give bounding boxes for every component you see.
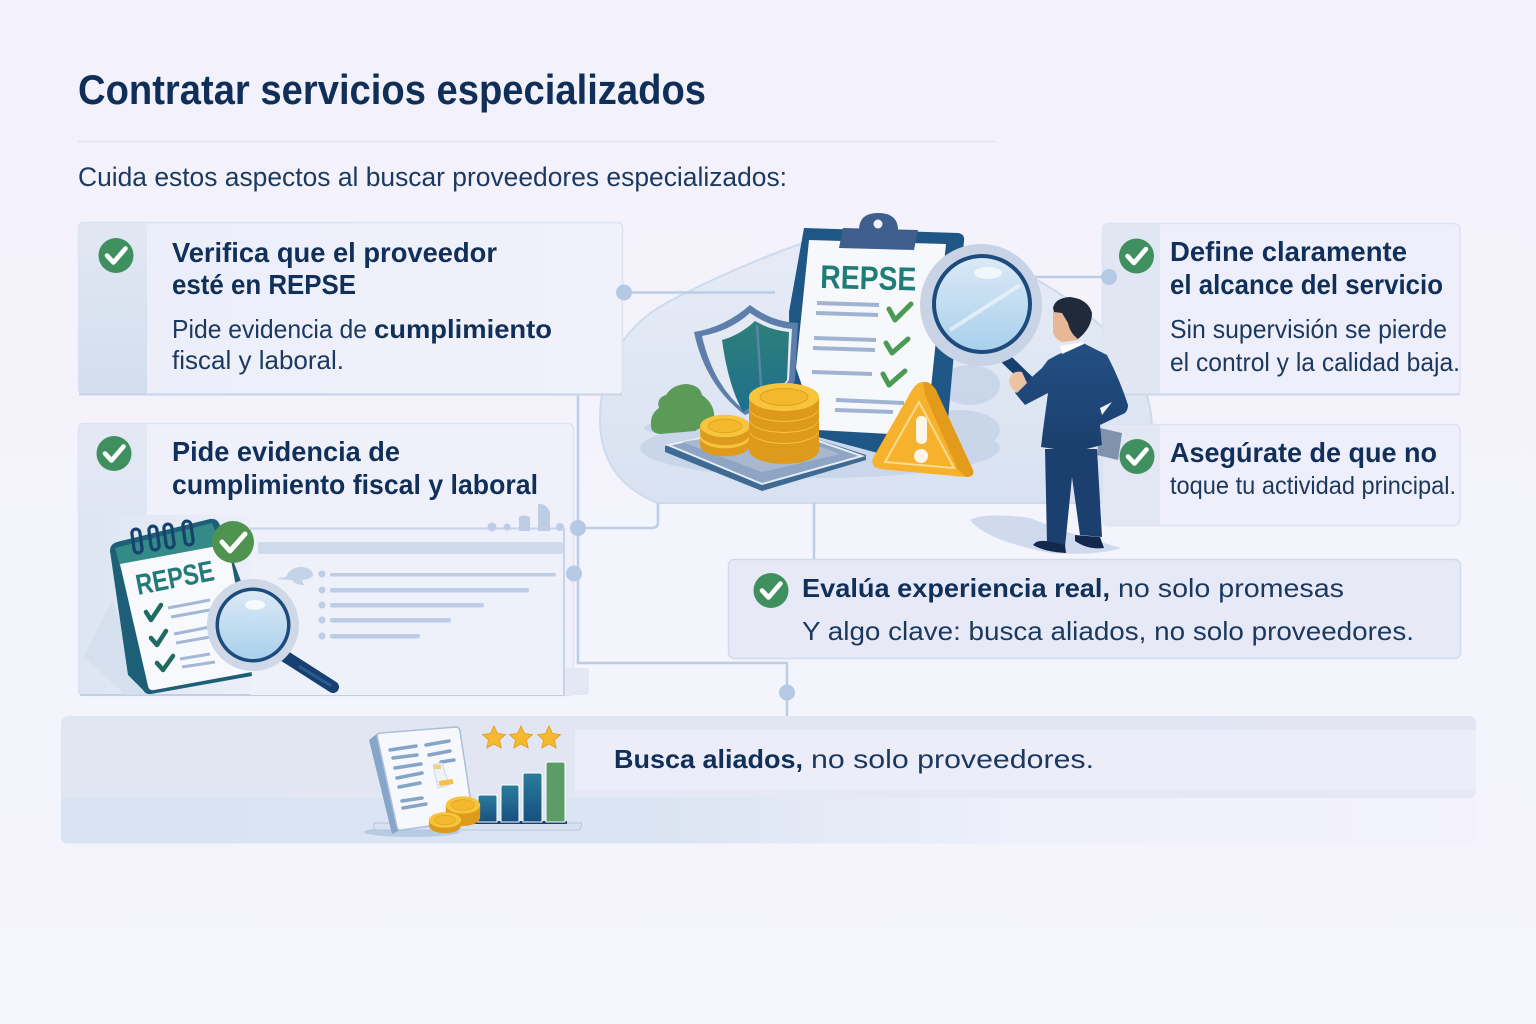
illustration: report, stars, bars and coins (364, 726, 582, 837)
figure: businessman (1009, 297, 1128, 553)
heading: Define claramente (1170, 236, 1407, 267)
heading (1170, 236, 1443, 300)
heading: Pide evidencia de (172, 436, 400, 467)
panel: verifica REPSE (78, 222, 622, 394)
body text (1170, 314, 1460, 377)
panel: pide evidencia (78, 424, 589, 696)
illustration: REPSE calendar and magnifier: REPSE (133, 555, 217, 602)
icon: bush (651, 384, 714, 434)
body text: Pide evidencia de (172, 314, 367, 344)
heading: Verifica que el proveedor (172, 237, 497, 268)
body text: Y algo clave: busca aliados, no solo proveedores. (802, 616, 1414, 646)
panel: define alcance (1102, 224, 1460, 394)
body text (172, 314, 552, 375)
icon: check (1119, 238, 1154, 274)
icon: check (96, 436, 132, 471)
ground shadows (640, 365, 1121, 554)
icon: clipboard (789, 213, 964, 453)
heading: cumplimiento fiscal y laboral (172, 469, 538, 500)
body text: cumplimiento (374, 314, 552, 344)
connector lines (578, 277, 1105, 716)
heading (802, 573, 1344, 603)
heading (614, 744, 1094, 774)
body text: Sin supervisión se pierde (1170, 314, 1447, 344)
heading: no solo promesas (1118, 573, 1344, 603)
heading: Asegúrate de que no (1170, 437, 1437, 468)
heading: no solo proveedores. (811, 744, 1094, 774)
heading: esté en REPSE (172, 269, 356, 300)
panel: asegúrate (1102, 424, 1460, 526)
icon: warning triangle (872, 382, 973, 477)
icon: check (98, 238, 134, 273)
body text: toque tu actividad principal. (1170, 472, 1456, 500)
subtitle: Cuida estos aspectos al buscar proveedores especializados: (78, 162, 787, 192)
icon: shield (694, 305, 798, 415)
hero illustration (640, 213, 1128, 554)
body text: fiscal y laboral. (172, 345, 344, 375)
heading: el alcance del servicio (1170, 269, 1443, 300)
icon: tablet base (665, 424, 866, 491)
heading: Evalúa experiencia real, (802, 573, 1110, 603)
icon: check asegúrate (1120, 439, 1154, 474)
heading (172, 436, 538, 500)
mini report list (250, 504, 564, 695)
connector nodes (566, 269, 1117, 700)
hero backdrop blob (600, 244, 1152, 503)
panel: evalúa experiencia (728, 560, 1460, 658)
heading (172, 237, 497, 300)
icon: large coin stack (749, 383, 819, 464)
icon: clipboard: REPSE (820, 258, 917, 298)
panel: busca aliados (61, 716, 1476, 844)
icon: small coin stack (700, 415, 750, 456)
icon: magnifier (920, 244, 1042, 388)
title: Contratar servicios especializados (78, 66, 706, 113)
body text: el control y la calidad baja. (1170, 347, 1460, 377)
illustration: REPSE calendar and magnifier (84, 519, 333, 695)
icon: check (754, 573, 788, 608)
heading: Busca aliados, (614, 744, 803, 774)
